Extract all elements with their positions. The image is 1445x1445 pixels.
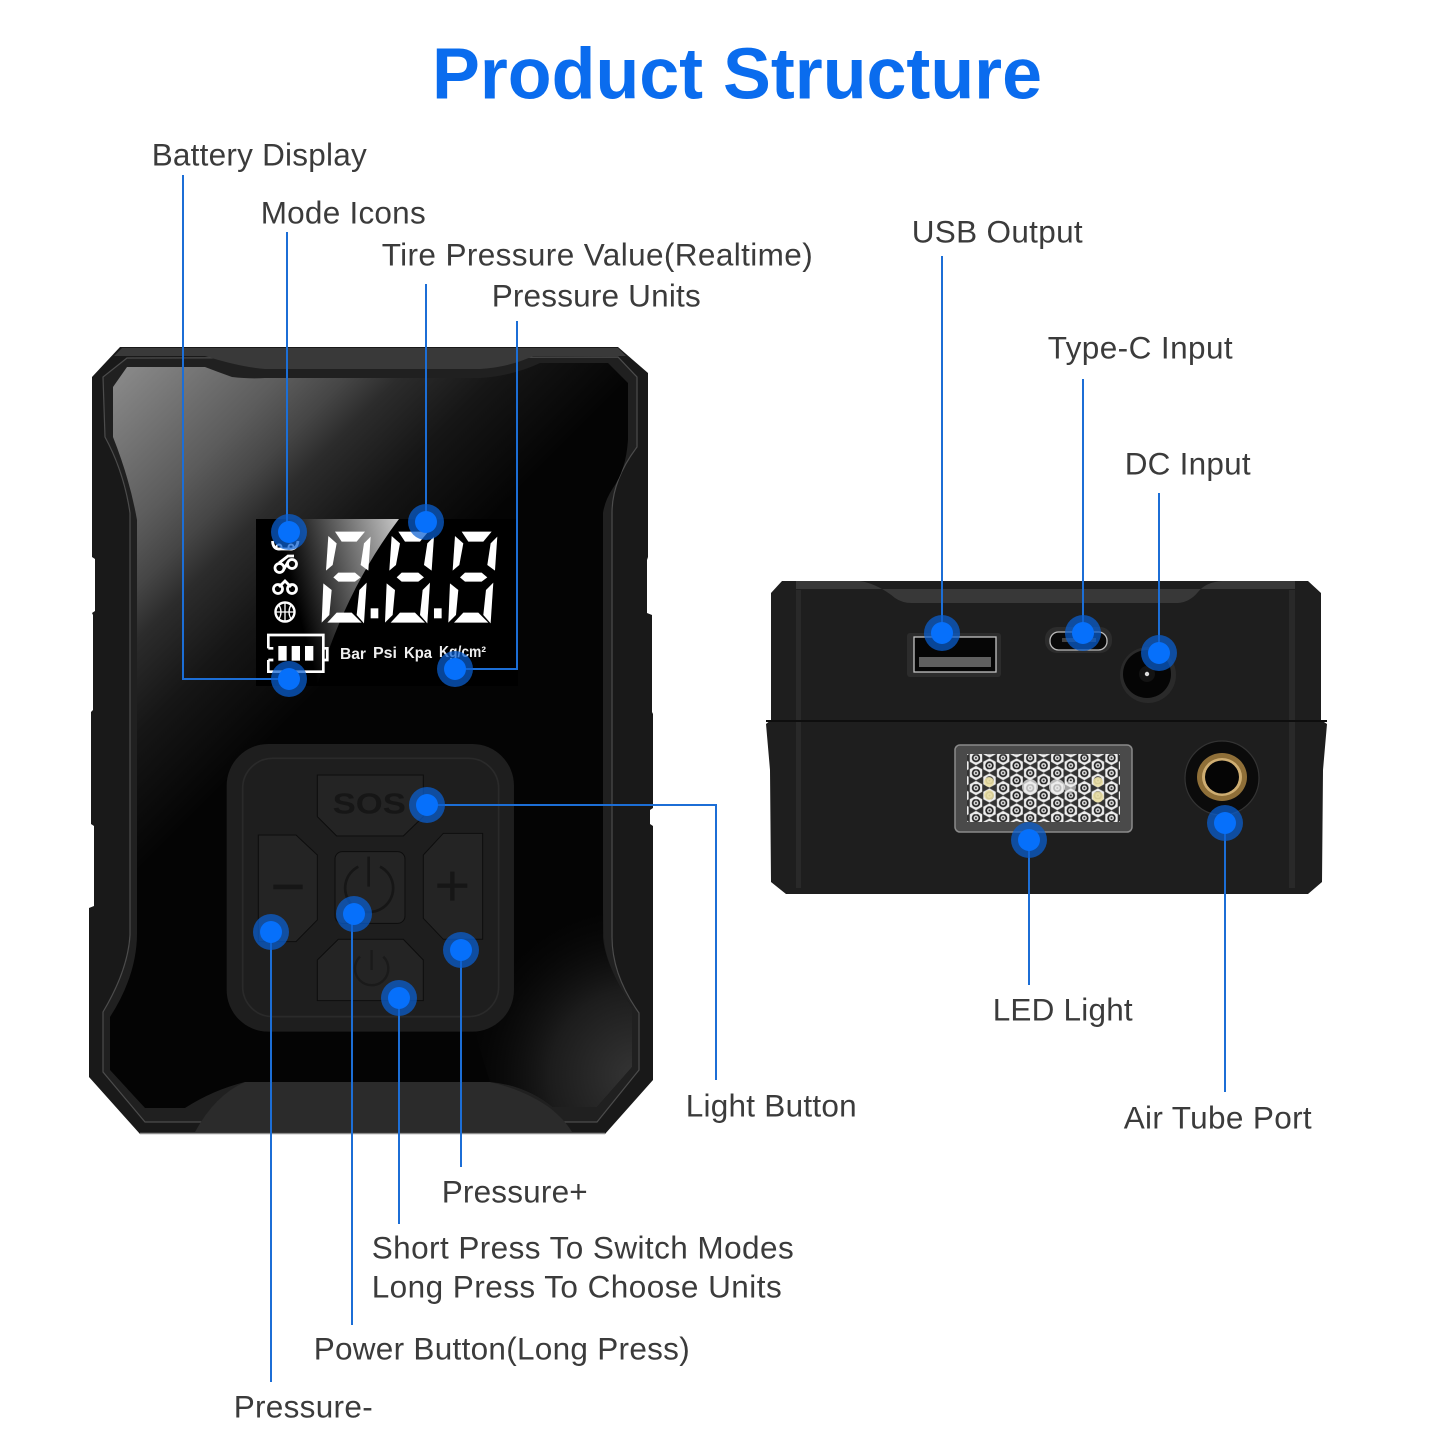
panel: side of inflator: [766, 581, 1327, 894]
pressure unit labels: Bar: [340, 646, 366, 663]
label: Pressure-: Pressure-: [234, 1388, 373, 1424]
USB port: [907, 633, 1001, 677]
device body side: [766, 581, 1327, 894]
pressure unit labels: Kpa: [404, 645, 432, 662]
LED panel: [955, 745, 1132, 832]
label: Mode Icons: Mode Icons: [261, 194, 426, 230]
button pad: [227, 744, 514, 1032]
button: minus: [258, 835, 317, 942]
top edge band: [114, 348, 626, 369]
pressure unit labels: [340, 644, 486, 663]
label: mode button: Short Press To Switch Modes: [372, 1230, 794, 1266]
label: LED Light: LED Light: [993, 992, 1133, 1028]
air tube port: [1185, 741, 1259, 815]
label: Battery Display: Battery Display: [152, 136, 367, 172]
label: Air Tube Port: Air Tube Port: [1124, 1100, 1312, 1136]
display screen: [256, 519, 518, 686]
button: SOS: [317, 775, 423, 836]
button: SOS: SOS: [333, 788, 406, 820]
pressure unit labels: Kg/cm²: [439, 644, 486, 661]
button: plus: [423, 833, 483, 939]
pressure digits: [268, 532, 497, 672]
label: mode button: [372, 998, 794, 1304]
top ridge: [796, 581, 1295, 603]
label: Pressure Units: [455, 278, 701, 669]
type-C port: [1045, 627, 1112, 653]
icon: battery: [268, 635, 327, 672]
callout markers: [253, 504, 1243, 1016]
panel: front of inflator: [89, 347, 653, 1134]
DC port: [1120, 647, 1176, 703]
label: Light Button: [427, 805, 857, 1124]
button: mode: [317, 939, 423, 1001]
icon: car: [272, 541, 298, 550]
title: Product Structure: [432, 34, 1042, 114]
icon: ball: [276, 602, 294, 622]
label: Tire Pressure Value: Tire Pressure Value(Realtime): [382, 236, 813, 272]
label: USB Output: USB Output: [912, 214, 1083, 250]
button: power: [335, 852, 405, 923]
device body: [89, 347, 653, 1134]
label: Light Button: Light Button: [686, 1088, 857, 1124]
label: Pressure Units: Pressure Units: [492, 278, 701, 314]
mode icons: [272, 541, 298, 622]
icon: bicycle: [274, 581, 296, 594]
label: mode button: Long Press To Choose Units: [372, 1268, 782, 1304]
label: DC Input: DC Input: [1125, 446, 1251, 482]
bottom edge band: [195, 1082, 572, 1132]
icon: motorcycle: [275, 556, 296, 572]
rim around glass: [103, 357, 639, 1122]
pressure unit labels: Psi: [373, 645, 397, 662]
label: Battery Display: [152, 136, 367, 679]
glass front: [110, 363, 632, 1108]
label: Pressure+: Pressure+: [442, 1174, 588, 1210]
label: Power Button: Power Button(Long Press): [314, 1330, 690, 1366]
label: Type-C Input: Type-C Input: [1048, 330, 1233, 366]
glass reflection: [465, 880, 632, 1107]
